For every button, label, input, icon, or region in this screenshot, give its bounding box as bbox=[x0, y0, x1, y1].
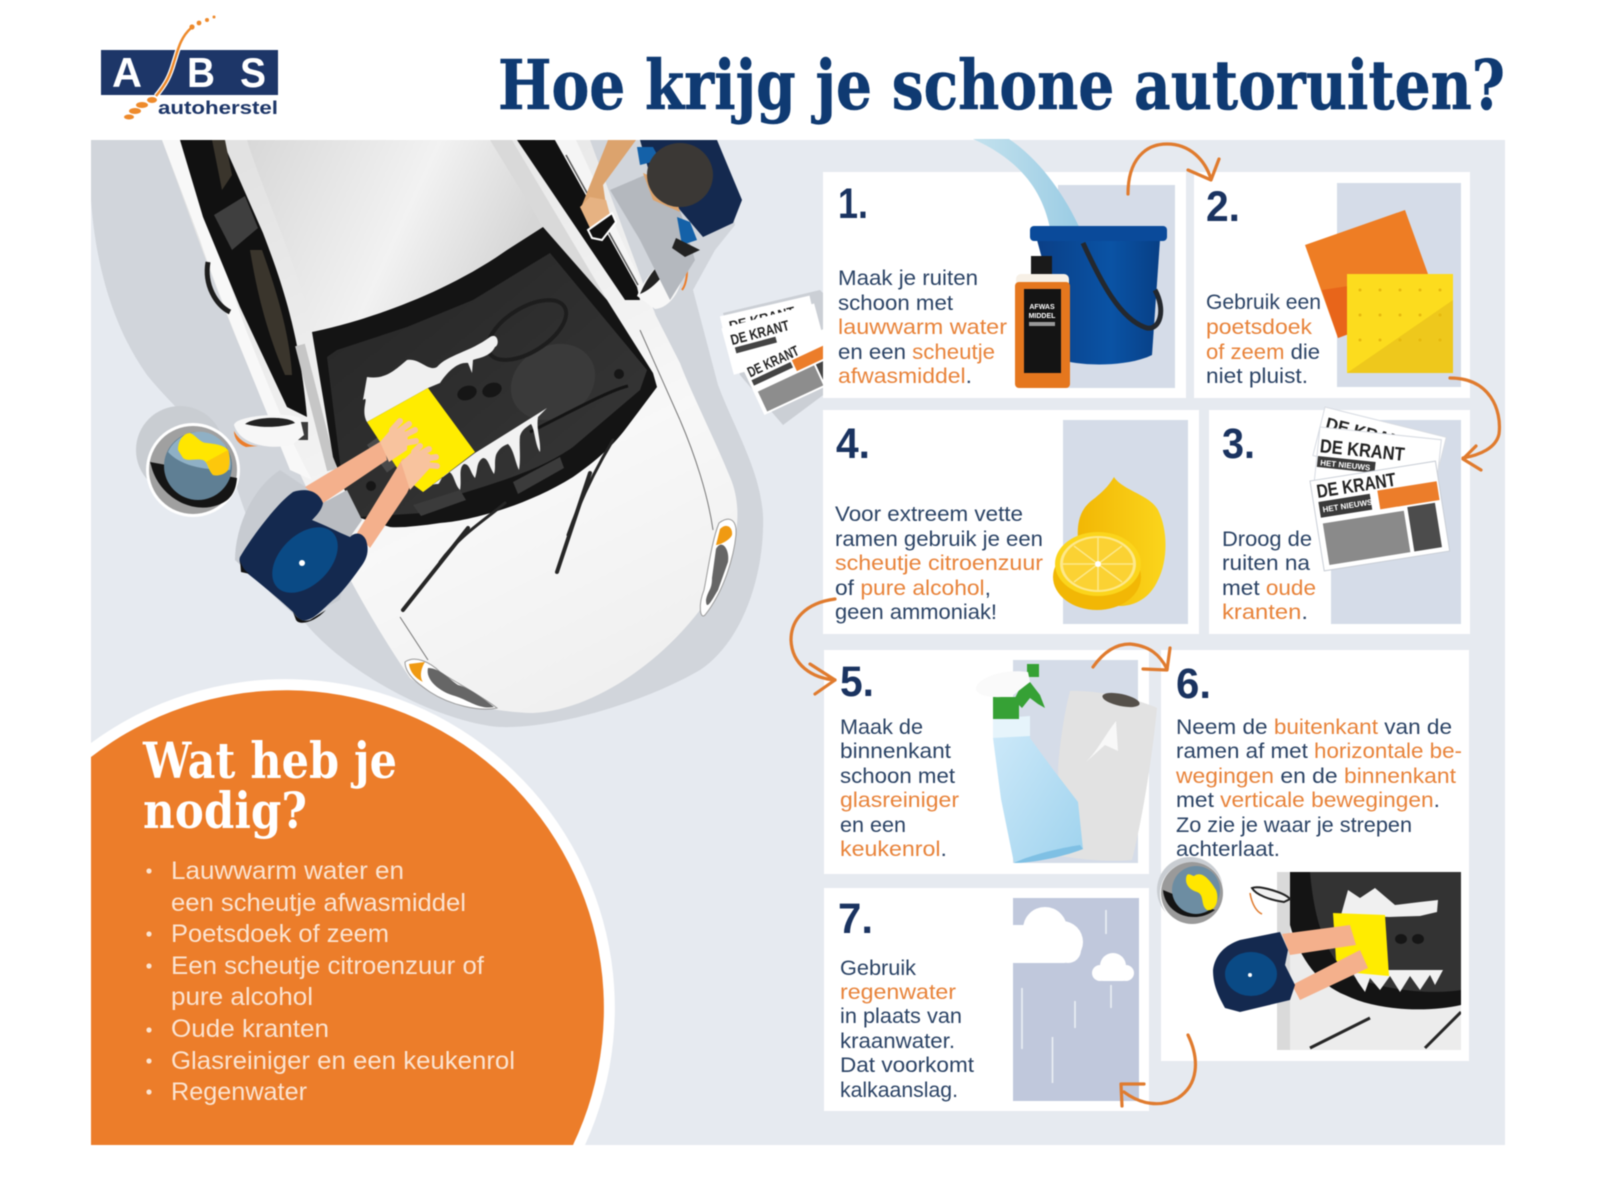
lemon bbox=[1053, 477, 1166, 610]
text: regenwater bbox=[840, 981, 956, 1004]
left mirror bbox=[234, 415, 308, 447]
list: pure alcohol bbox=[171, 983, 313, 1011]
dashboard bbox=[327, 253, 647, 517]
logo: ABS autoherstel bbox=[101, 16, 278, 120]
text: Gebruik een bbox=[1206, 291, 1321, 314]
list: Glasreiniger en een keukenrol bbox=[171, 1047, 515, 1075]
text: ramen af met horizontale be- bbox=[1176, 740, 1462, 763]
paper roll bbox=[1058, 690, 1157, 861]
wipers bbox=[403, 440, 613, 610]
windshield bbox=[312, 227, 657, 527]
roof bbox=[248, 140, 542, 290]
text: in plaats van bbox=[840, 1005, 962, 1028]
text: en een bbox=[840, 814, 906, 837]
bottle: MIDDEL bbox=[1029, 313, 1056, 320]
arrow: step 2 to 3 bbox=[1450, 378, 1499, 470]
card 1 bbox=[823, 139, 1186, 398]
hood seams bbox=[400, 330, 713, 660]
text: kalkaanslag. bbox=[840, 1079, 958, 1102]
card 4 bbox=[823, 410, 1199, 634]
text: Voor extreem vette bbox=[835, 503, 1023, 526]
card 7 bbox=[824, 888, 1149, 1111]
orange circle border bbox=[91, 679, 615, 1145]
logo: ABS autoherstel: A bbox=[112, 49, 142, 96]
text: niet pluist. bbox=[1206, 365, 1308, 388]
text bbox=[840, 957, 974, 1102]
text: Dat voorkomt bbox=[840, 1054, 974, 1077]
yellow cloth bbox=[367, 388, 475, 492]
arrow: step 4 to 5 bbox=[791, 599, 835, 694]
left side window bbox=[180, 140, 307, 417]
text: Maak je ruiten bbox=[838, 267, 978, 290]
card 5 bbox=[824, 650, 1157, 874]
bucket small bbox=[1157, 857, 1223, 923]
panel background bbox=[91, 140, 1505, 1145]
text bbox=[835, 503, 1043, 624]
newspapers bbox=[1310, 407, 1450, 571]
text: poetsdoek bbox=[1206, 316, 1313, 339]
newspaper on ground: DE KRANT bbox=[728, 304, 796, 333]
bucket bbox=[1030, 226, 1167, 364]
text: met verticale bewegingen . bbox=[1176, 789, 1440, 812]
newspapers: HET NIEUWS bbox=[1320, 458, 1371, 473]
torso small bbox=[1213, 932, 1295, 1012]
text: Zo zie je waar je strepen bbox=[1176, 814, 1412, 837]
text: ramen gebruik je een bbox=[835, 528, 1043, 551]
text: geen ammoniak! bbox=[835, 601, 997, 624]
car body bbox=[162, 140, 737, 713]
list: Lauwwarm water en bbox=[171, 857, 404, 885]
headlight right bbox=[700, 519, 736, 616]
headlight left bbox=[405, 659, 497, 709]
card 3 bbox=[1209, 407, 1470, 634]
person washing windshield bbox=[235, 421, 437, 623]
car shadow bbox=[91, 140, 763, 727]
foam drips bbox=[423, 408, 547, 492]
text: keukenrol . bbox=[840, 838, 947, 861]
list: Poetsdoek of zeem bbox=[171, 920, 389, 948]
arrow: step 1 to 2 bbox=[1128, 144, 1219, 194]
pillar bbox=[300, 345, 332, 470]
text: lauwwarm water bbox=[838, 316, 1007, 339]
text: Maak de bbox=[840, 716, 923, 739]
logo: ABS autoherstel: autoherstel bbox=[158, 98, 278, 118]
list: Regenwater bbox=[171, 1078, 307, 1106]
bucket with sponge bbox=[136, 406, 240, 517]
heading: Wat heb je bbox=[142, 731, 397, 790]
logo: ABS autoherstel: B bbox=[187, 49, 215, 96]
bullets bbox=[146, 868, 152, 1095]
text: of zeem die bbox=[1206, 341, 1320, 364]
number: 3. bbox=[1222, 420, 1255, 468]
text: kraanwater. bbox=[840, 1030, 955, 1053]
newspapers: DE KRANT bbox=[1315, 470, 1398, 503]
newspaper on ground bbox=[720, 290, 824, 425]
text: met oude bbox=[1222, 577, 1316, 600]
hands bbox=[380, 428, 408, 462]
bottle bbox=[1015, 256, 1070, 388]
text: Gebruik bbox=[840, 957, 917, 980]
water stream bbox=[973, 139, 1081, 231]
text: scheutje citroenzuur bbox=[835, 552, 1043, 575]
card 2 bbox=[1194, 172, 1470, 398]
rain window bbox=[1005, 898, 1139, 1101]
cap bbox=[272, 526, 338, 594]
newspaper on ground: DE KRANT bbox=[729, 318, 791, 349]
text: schoon met bbox=[840, 765, 955, 788]
text: glasreiniger bbox=[840, 789, 959, 812]
number: 4. bbox=[836, 420, 870, 468]
number: 1. bbox=[838, 180, 868, 228]
text: achterlaat. bbox=[1176, 838, 1280, 861]
mirror small bbox=[1252, 887, 1290, 902]
text bbox=[838, 267, 1007, 388]
text: en een scheutje bbox=[838, 341, 995, 364]
text bbox=[1175, 716, 1462, 861]
list bbox=[171, 857, 515, 1106]
text: of pure alcohol , bbox=[835, 577, 991, 600]
right mirror bbox=[636, 269, 689, 310]
arrow: step 5 to 6 bbox=[1093, 644, 1170, 670]
door handle bbox=[207, 262, 230, 312]
panel: what do you need bbox=[142, 731, 515, 1106]
text bbox=[1206, 291, 1321, 388]
arms bbox=[305, 440, 387, 503]
newspapers: DE KRANT bbox=[1324, 414, 1414, 454]
car illustration bbox=[91, 140, 846, 1145]
text: wegingen en de binnenkant bbox=[1175, 765, 1456, 788]
text bbox=[840, 716, 959, 861]
vents bbox=[413, 457, 564, 516]
arrow: step 6 to 7 bbox=[1121, 1035, 1195, 1106]
logo: ABS autoherstel: S bbox=[240, 49, 266, 96]
number: 2. bbox=[1206, 183, 1240, 231]
text bbox=[1222, 528, 1316, 624]
list: Oude kranten bbox=[171, 1015, 329, 1043]
newspapers: DE KRANT bbox=[1319, 436, 1406, 466]
card 6 bbox=[1157, 650, 1469, 1061]
list: een scheutje afwasmiddel bbox=[171, 889, 466, 917]
text: kranten . bbox=[1222, 601, 1308, 624]
number: 7. bbox=[838, 895, 873, 943]
text: Droog de bbox=[1222, 528, 1312, 551]
newspaper on ground: DE KRANT bbox=[745, 343, 802, 381]
text: ruiten na bbox=[1222, 552, 1310, 575]
person cleaning side window bbox=[580, 140, 742, 300]
foam top bbox=[363, 336, 498, 422]
list: Een scheutje citroenzuur of bbox=[171, 952, 484, 980]
right door window strip bbox=[517, 140, 640, 300]
newspapers: HET NIEUWS bbox=[1322, 497, 1374, 514]
arms small bbox=[1282, 925, 1368, 1000]
bottle: AFWAS bbox=[1029, 304, 1055, 311]
number: 5. bbox=[840, 658, 874, 706]
text: afwasmiddel . bbox=[838, 365, 972, 388]
detail illustration bbox=[1157, 857, 1461, 1050]
cloths bbox=[1305, 210, 1453, 373]
torso bbox=[239, 490, 368, 620]
number: 6. bbox=[1176, 660, 1211, 708]
heading: nodig? bbox=[143, 781, 307, 840]
spray bottle bbox=[976, 664, 1083, 863]
text: binnenkant bbox=[840, 740, 951, 763]
text: schoon met bbox=[838, 292, 953, 315]
text: Neem de buitenkant van de bbox=[1176, 716, 1452, 739]
orange circle bbox=[91, 690, 604, 1145]
